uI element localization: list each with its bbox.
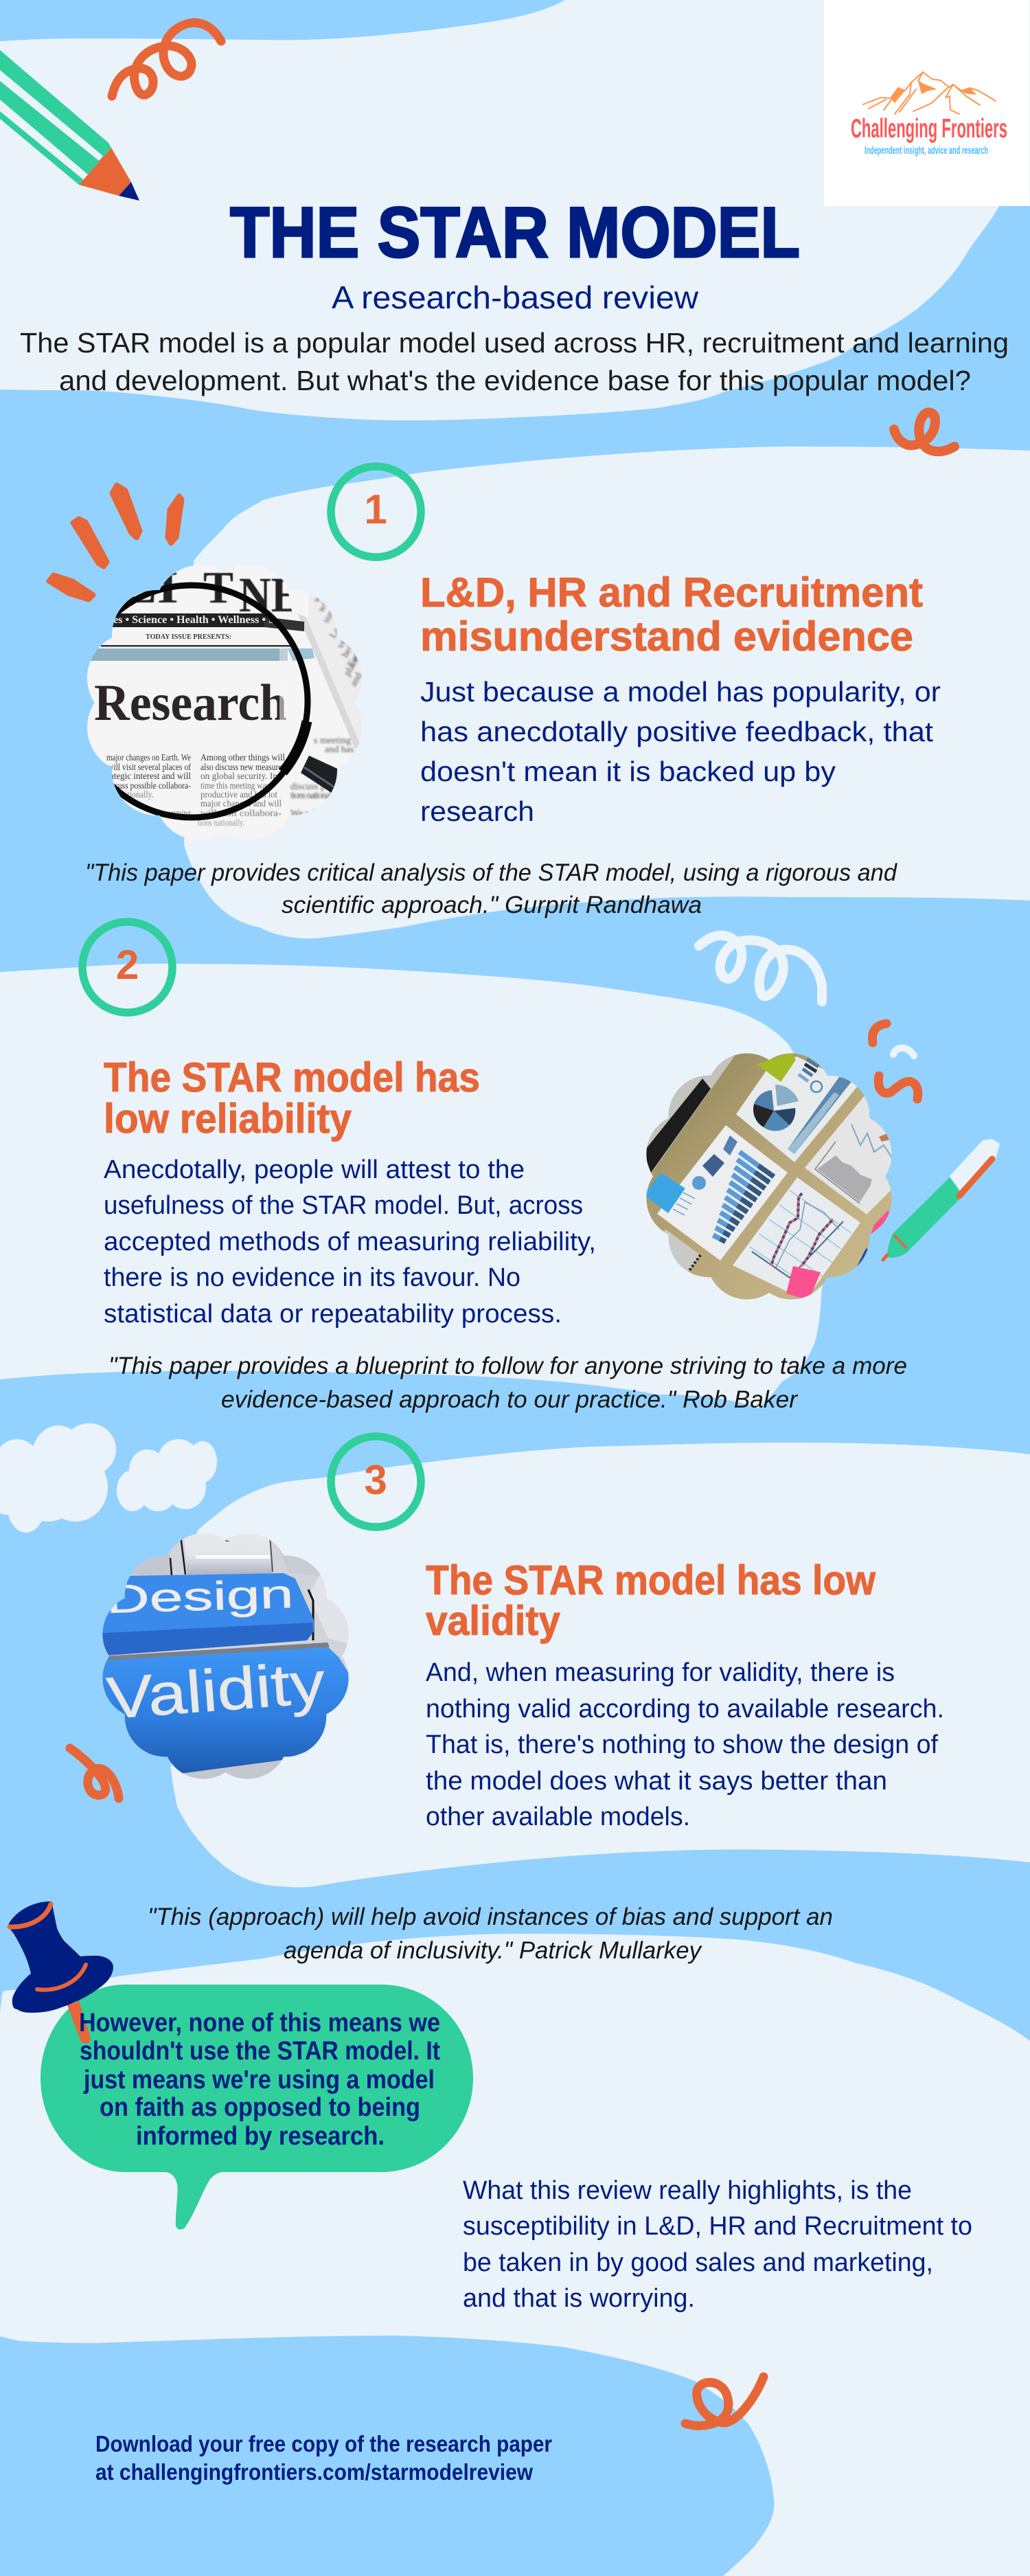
intro text (20, 327, 1009, 396)
body text 3: And, when measuring for validity, there is (426, 1658, 895, 1687)
image: research newspaper under magnifier: ategic interest and will (110, 771, 191, 781)
body text 2 (104, 1155, 596, 1329)
closing text: susceptibility in L&D, HR and Recruitment to (463, 2212, 972, 2241)
body text 1: Just because a model has popularity, or (420, 676, 941, 708)
body text 1 (420, 676, 941, 827)
intro text: and development. But what's the evidence base for this popular model? (59, 365, 971, 396)
image: research newspaper under magnifier: also discuss new measures (201, 762, 285, 772)
image: research newspaper under magnifier: Research (94, 675, 287, 732)
image: design and validity keyboard keys: L (225, 1536, 229, 1544)
icon: orange squiggle right (894, 412, 954, 451)
closing text: What this review really highlights, is the (463, 2176, 912, 2205)
panel: header background (0, 0, 1030, 420)
closing text: be taken in by good sales and marketing, (463, 2248, 933, 2277)
heading 1: misunderstand evidence (420, 613, 913, 659)
heading 3: The STAR model has low (426, 1557, 876, 1603)
heading 1: L&D, HR and Recruitment (420, 569, 923, 615)
body text 2: there is no evidence in its favour. No (104, 1263, 520, 1292)
heading 1 (420, 569, 923, 659)
title: THE STAR MODEL (230, 193, 800, 273)
quote 2: "This paper provides a blueprint to follow for anyone striving to take a more (108, 1353, 907, 1379)
body text 2: Anecdotally, people will attest to the (104, 1155, 525, 1184)
quote 3 (148, 1903, 833, 1964)
heading 2: low reliability (104, 1096, 352, 1142)
icon: push pin (8, 1901, 113, 2044)
icon: orange squiggle bottom (685, 2377, 764, 2426)
image: research newspaper under magnifier: and has (325, 745, 354, 755)
image: research newspaper under magnifier: on global security. In (201, 771, 277, 781)
number badge 2: 2 (116, 942, 139, 988)
bubble text: shouldn't use the STAR model. It (80, 2037, 440, 2066)
quote 1 (85, 859, 897, 918)
image: research newspaper under magnifier: Earth (345, 646, 365, 669)
image: research newspaper under magnifier: sure (321, 606, 338, 625)
image: research newspaper under magnifier: T (203, 563, 233, 613)
image: research newspaper under magnifier: time this meeting was (201, 780, 269, 791)
body text 3 (426, 1658, 944, 1831)
bubble text (79, 2009, 440, 2151)
image: research newspaper under magnifier: will (311, 587, 328, 605)
image: research newspaper under magnifier: TODAY ISSUE PRESENTS: (146, 633, 231, 641)
logo (824, 0, 1029, 206)
number badge 1 (331, 466, 421, 557)
image: research newspaper under magnifier: place (342, 655, 361, 678)
image: design and validity keyboard keys (102, 1533, 349, 1779)
icon: white squiggle (699, 936, 822, 1002)
body text 3: That is, there's nothing to show the design of (426, 1730, 938, 1759)
body text 2: accepted methods of measuring reliability, (104, 1228, 596, 1256)
image: research newspaper under magnifier: La (328, 626, 342, 640)
image: research newspaper under magnifier: being (340, 636, 360, 659)
quote 2 (108, 1353, 907, 1413)
icon: orange squiggle top (112, 23, 221, 96)
number badge 2 (82, 922, 172, 1013)
image: research newspaper under magnifier: will visit collabora- (201, 808, 282, 818)
icon: orange squiggle (70, 1748, 119, 1798)
image: research newspaper under magnifier: scuss possible collabora- (111, 780, 191, 791)
image: research newspaper under magnifier: and (348, 671, 365, 688)
quote 1: scientific approach." Gurprit Randhawa (282, 892, 702, 918)
heading 2: The STAR model has (104, 1054, 480, 1100)
image: research newspaper under magnifier: productive and has lot (201, 789, 277, 800)
image: research newspaper under magnifier: NE (239, 567, 301, 622)
number badge 3: 3 (364, 1457, 387, 1503)
icon: orange and white marks (872, 1024, 918, 1099)
body text 2: usefulness of the STAR model. But, across (104, 1191, 583, 1220)
image: printed charts on a desk (646, 1053, 892, 1300)
heading 3 (426, 1557, 876, 1644)
icon: pencil (0, 50, 139, 201)
image: research newspaper under magnifier: warming (165, 808, 191, 818)
image: research newspaper under magnifier: discuss p (290, 782, 325, 792)
image: research newspaper under magnifier: tions national (290, 791, 332, 801)
image: research newspaper under magnifier: will visit several places of (108, 762, 191, 772)
image: research newspaper under magnifier: EI (120, 563, 179, 613)
image: research newspaper under magnifier: ver (335, 635, 351, 651)
panel: section 1 background (184, 447, 1030, 938)
panel: section 3 background (171, 1443, 1030, 1888)
speech bubble (41, 1985, 473, 2230)
panel: section 2 background (0, 964, 825, 1408)
footer blue shape (0, 2336, 774, 2576)
bubble text: However, none of this means we (79, 2009, 440, 2037)
bar chart on the sheet (713, 1152, 774, 1242)
image: research newspaper under magnifier: ationally. (124, 789, 154, 800)
image: research newspaper under magnifier: tions nationally. (198, 817, 244, 828)
icon: pen (883, 1139, 1000, 1260)
quote 3: "This (approach) will help avoid instances of bias and support an (148, 1903, 833, 1930)
body text 3: nothing valid according to available research. (426, 1695, 944, 1724)
bubble text: just means we're using a model (83, 2066, 435, 2094)
panel: closing background (0, 1934, 1030, 2576)
image: research newspaper under magnifier: major changes and will (201, 798, 282, 809)
icon: clouds (0, 1423, 217, 1533)
number badge 3 (331, 1436, 421, 1527)
pie chart on the sheet (753, 1085, 799, 1131)
image: research newspaper under magnifier: Among other things will (201, 752, 285, 762)
image: design and validity keyboard keys: Validity (104, 1649, 328, 1732)
section 1 (49, 466, 941, 918)
download call to action: Download your free copy of the research paper (95, 2431, 552, 2456)
body text 1: doesn't mean it is backed up by (420, 756, 836, 787)
closing text: and that is worrying. (463, 2284, 695, 2313)
section 3 (0, 1423, 944, 1831)
number badge 1: 1 (364, 486, 387, 532)
body text 3: the model does what it says better than (426, 1767, 887, 1796)
download call to action (95, 2431, 552, 2485)
image: research newspaper under magnifier: We will (290, 809, 321, 819)
image: research newspaper under magnifier: major changes on Earth. We (106, 752, 191, 762)
intro text: The STAR model is a popular model used across HR, recruitment and learning (20, 327, 1009, 359)
body text 3: other available models. (426, 1803, 690, 1831)
download call to action: at challengingfrontiers.com/starmodelreview (95, 2459, 533, 2485)
logo mountain (863, 72, 996, 114)
quote 3: agenda of inclusivity." Patrick Mullarkey (284, 1937, 702, 1964)
subtitle: A research-based review (332, 280, 699, 315)
body text 1: research (420, 795, 534, 827)
section 2 (82, 922, 1000, 1413)
body text 1: has anecdotally positive feedback, that (420, 716, 934, 747)
image: research newspaper under magnifier: will (316, 596, 332, 614)
bubble text: informed by research. (136, 2122, 385, 2151)
heading 2 (104, 1054, 480, 1142)
image: research newspaper under magnifier: es • Science • Health • Wellness • S (113, 614, 275, 626)
body text 2: statistical data or repeatability process. (104, 1300, 562, 1329)
bubble text: on faith as opposed to being (100, 2093, 420, 2122)
image: design and validity keyboard keys: Design (105, 1572, 294, 1622)
image: research newspaper under magnifier (87, 565, 362, 840)
quote 1: "This paper provides critical analysis of the STAR model, using a rigorous and (85, 859, 897, 886)
quote 2: evidence-based approach to our practice." Rob Baker (221, 1386, 798, 1413)
heading 3: validity (426, 1598, 561, 1644)
icon: orange burst (49, 485, 182, 600)
image: research newspaper under magnifier: s meeting (314, 736, 351, 746)
closing text (463, 2176, 972, 2313)
